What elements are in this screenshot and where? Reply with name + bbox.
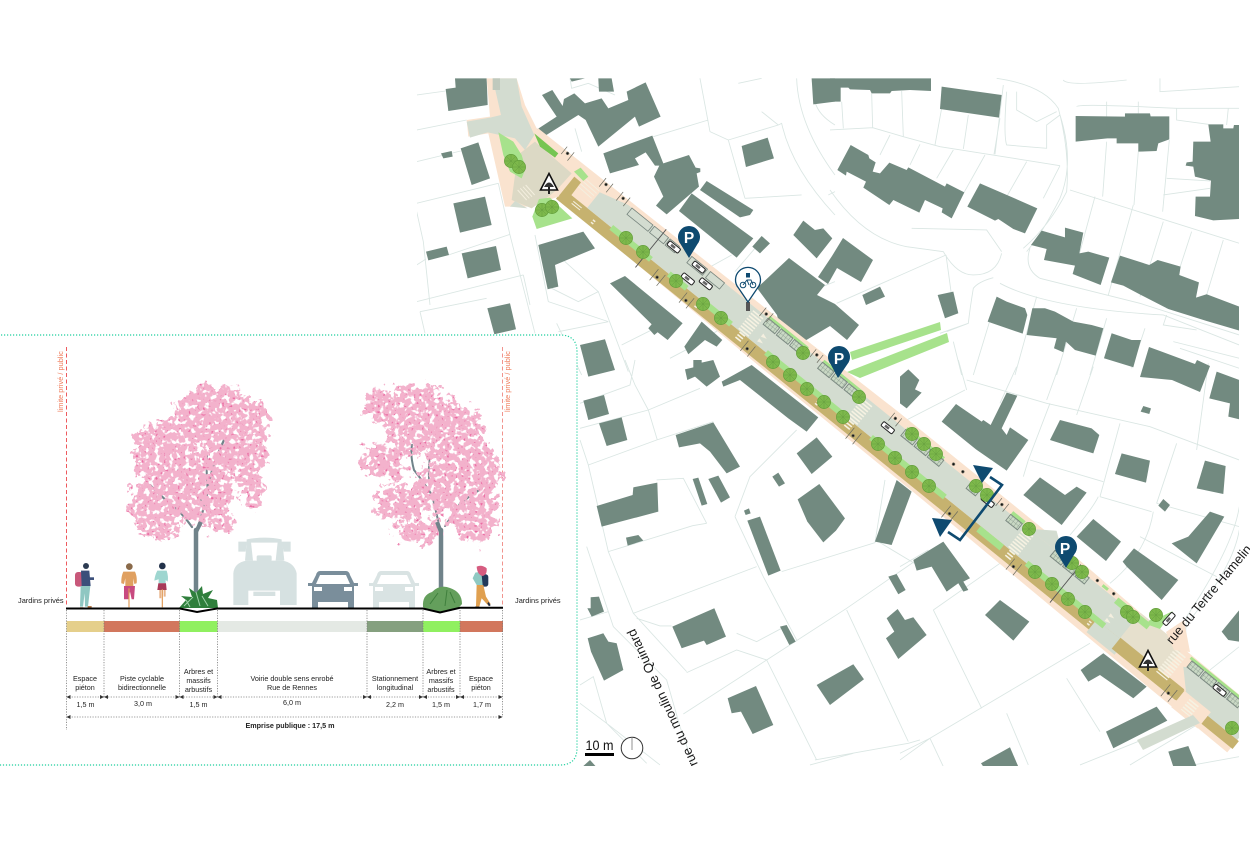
icon: parking pin 1: P xyxy=(684,230,694,247)
crosswalks xyxy=(732,313,1213,713)
section arrows xyxy=(932,465,1002,540)
shrub right xyxy=(423,587,462,612)
tree left xyxy=(131,385,268,600)
panel: cross-section xyxy=(0,335,577,765)
cyclist one xyxy=(121,563,137,607)
width values: 2,2 m xyxy=(386,700,404,709)
pedestrian left xyxy=(75,563,94,608)
lawn at rue du Tertre Hamelin xyxy=(1146,611,1173,629)
icon: north crossroads marker xyxy=(540,174,558,194)
icon: parking pin 2: P xyxy=(834,351,844,368)
car dark xyxy=(308,571,358,608)
labels: gardens right: Jardins privés xyxy=(515,596,561,605)
icon: parking pin 1 xyxy=(678,226,700,258)
street label: rue du moulin de Quinard: rue du moulin de Quinard xyxy=(624,627,701,769)
parked vehicles xyxy=(657,241,1228,708)
plaza north xyxy=(467,78,599,229)
column labels: Arbres et xyxy=(184,667,213,676)
ground line xyxy=(66,608,503,612)
street plan xyxy=(505,118,1250,754)
cycle path xyxy=(556,189,1225,733)
pedestrian right xyxy=(473,566,491,608)
column labels: piéton xyxy=(471,683,491,692)
map: site plan xyxy=(417,78,1250,769)
width values: 1,5 m xyxy=(77,700,94,709)
dimension lines xyxy=(66,610,502,730)
cyclist two xyxy=(154,563,168,607)
pavement xyxy=(505,123,1250,752)
parking bays xyxy=(627,208,725,289)
column labels xyxy=(73,667,493,694)
column labels: Voirie double sens enrobé xyxy=(250,674,334,683)
green strips xyxy=(847,322,949,378)
width values: 1,5 m xyxy=(432,700,450,709)
column labels: Stationnement xyxy=(372,674,418,683)
column labels: piéton xyxy=(75,683,95,692)
column labels: Espace xyxy=(73,674,97,683)
width values xyxy=(77,698,491,709)
ticks and dots xyxy=(533,147,1202,702)
junction corners xyxy=(1166,620,1190,652)
icon: north compass xyxy=(621,737,643,759)
tractor xyxy=(233,538,297,605)
icon: parking pin 3 xyxy=(1055,536,1077,568)
side road south-east xyxy=(1137,715,1200,750)
section lines xyxy=(635,229,1081,603)
profile bar xyxy=(66,621,503,632)
column labels: arbustifs xyxy=(185,685,212,694)
trees xyxy=(504,154,1239,735)
shrub left xyxy=(179,586,218,608)
column labels: bidirectionnelle xyxy=(118,683,166,692)
column labels: Espace xyxy=(469,674,493,683)
scale bar: 10 m xyxy=(586,738,614,753)
column labels: arbustifs xyxy=(427,685,455,694)
hatched bays xyxy=(763,318,1242,708)
icon: south crossroads marker xyxy=(1140,650,1156,671)
width values: 3,0 m xyxy=(134,699,152,708)
dimension arrowheads xyxy=(66,695,502,719)
green verges xyxy=(610,225,1239,698)
parked vehicle at junction xyxy=(1162,612,1176,626)
total width: Emprise publique : 17,5 m xyxy=(245,721,335,730)
icon: parking pin 3: P xyxy=(1060,541,1070,558)
grey plaza and branch xyxy=(1034,529,1059,550)
carriageway xyxy=(587,186,1138,639)
labels: gardens left: Jardins privés xyxy=(18,596,64,605)
tree right xyxy=(363,386,500,596)
column labels: massifs xyxy=(186,676,211,685)
limit line right: limite privé / public xyxy=(503,351,512,412)
column labels: massifs xyxy=(429,676,454,685)
icon: parking pin 2 xyxy=(828,346,850,378)
cycle and road markers xyxy=(591,204,1115,635)
buildings xyxy=(426,78,1239,767)
column labels: longitudinal xyxy=(377,683,414,692)
parcel lines xyxy=(417,78,1239,767)
car light xyxy=(369,571,419,608)
width values: 6,0 m xyxy=(283,698,301,707)
limit line left: limite privé / public xyxy=(56,351,65,412)
column labels: Arbres et xyxy=(426,667,456,676)
icon: bike parking pin xyxy=(736,267,760,311)
width values: 1,7 m xyxy=(473,700,491,709)
column labels: Piste cyclable xyxy=(120,674,164,683)
column labels: Rue de Rennes xyxy=(267,683,317,692)
width values: 1,5 m xyxy=(190,700,207,709)
